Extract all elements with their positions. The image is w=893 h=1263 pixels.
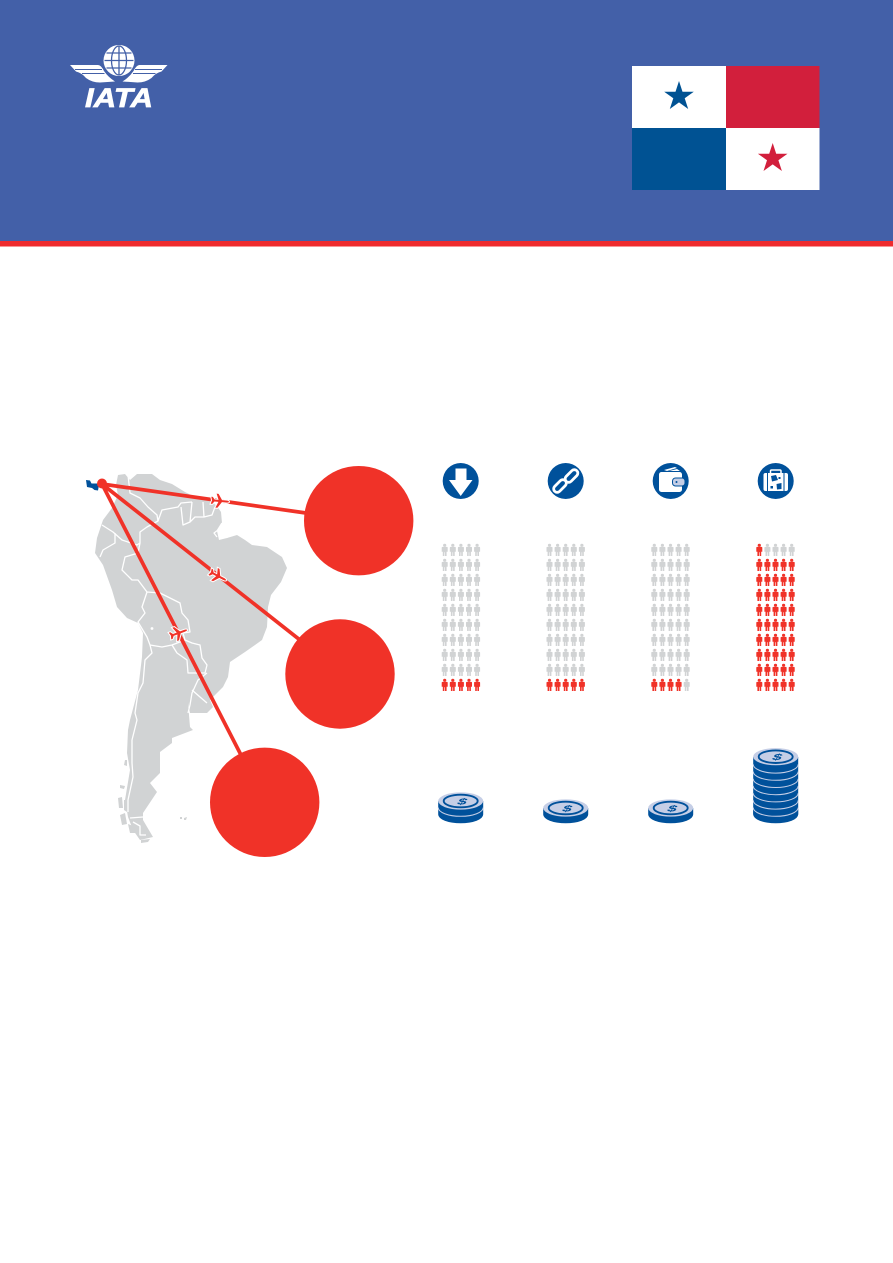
coin stack: column 1: $ (455, 797, 470, 806)
chilean islands (118, 760, 187, 843)
people chart: column 2 (546, 544, 585, 691)
header band (0, 0, 893, 246)
red star (758, 143, 788, 171)
coin stack: column 3 (648, 799, 693, 823)
plane middle (207, 566, 229, 586)
people chart: column 1 (442, 544, 480, 691)
route to top circle (102, 484, 306, 513)
coin stack: column 2: $ (560, 804, 575, 813)
logo globe (104, 45, 134, 76)
logo wordmark: IATA (85, 83, 153, 113)
icon: down arrow (443, 463, 479, 499)
red circle middle (285, 619, 395, 729)
people chart: column 3 (651, 544, 690, 691)
blue star (664, 81, 694, 109)
map of South America (95, 474, 287, 843)
coin stack: column 4 (753, 748, 798, 823)
icon: Panama shape (86, 480, 99, 490)
coin stack: column 3: $ (665, 804, 680, 813)
icon: suitcase (758, 463, 794, 499)
IATA logo (70, 45, 168, 113)
route to middle circle (102, 484, 300, 640)
plane top (210, 493, 230, 509)
flag of Panama (632, 66, 820, 190)
country borders (100, 475, 227, 835)
people chart: column 4 (756, 544, 795, 691)
route lines (102, 484, 306, 755)
icon: chain link (548, 463, 584, 499)
plane bottom (168, 623, 189, 643)
coin stack: column 4: $ (770, 752, 785, 762)
coin stack: column 2 (543, 799, 588, 823)
lake (151, 627, 153, 630)
red circle bottom (210, 748, 319, 857)
plane icons (168, 493, 230, 643)
red circle top (304, 466, 413, 575)
logo wings (70, 65, 168, 82)
route to bottom circle (102, 484, 241, 755)
origin dot (97, 478, 107, 488)
icon: wallet (653, 463, 689, 499)
coin stack: column 1 (438, 792, 483, 823)
